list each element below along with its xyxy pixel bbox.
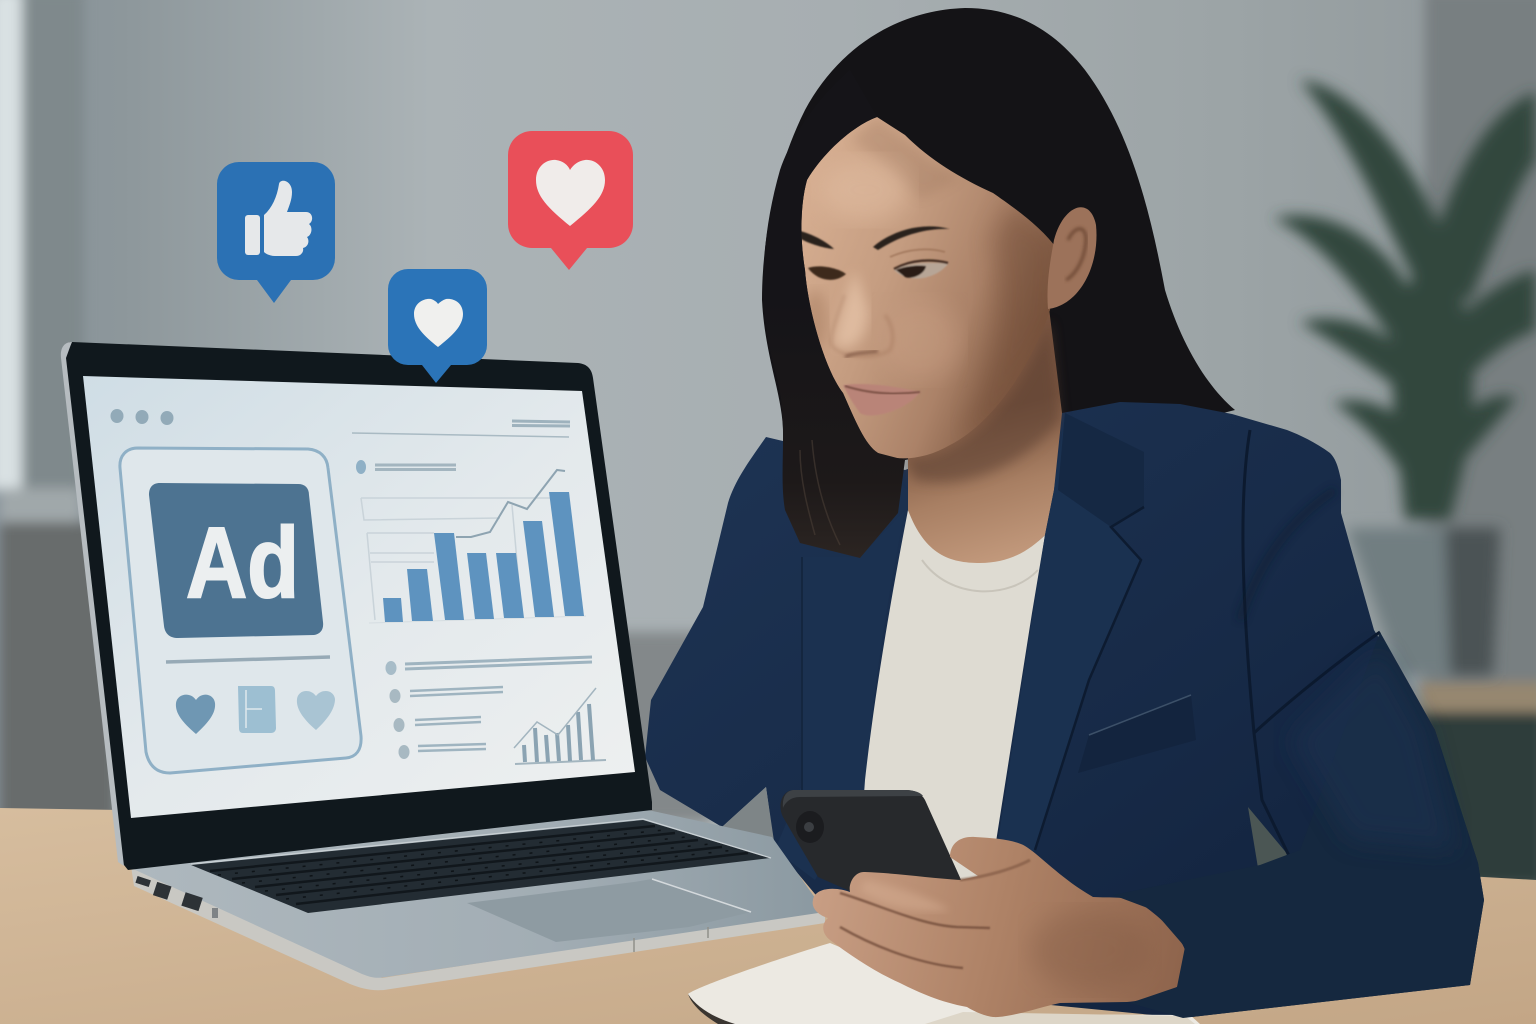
face — [801, 117, 1058, 458]
eyes — [808, 249, 948, 280]
jacket pocket — [1078, 695, 1196, 773]
ad box — [149, 483, 323, 638]
keyboard — [191, 820, 770, 913]
lips — [843, 384, 920, 415]
card heart right — [297, 691, 335, 730]
gaps between arms and torso — [722, 787, 775, 848]
neck shadow — [905, 320, 1060, 482]
bar chart — [356, 460, 586, 623]
wooden table — [0, 808, 1536, 1024]
phone — [780, 790, 962, 892]
floating bubble: red heart — [508, 131, 633, 270]
back hair — [762, 8, 1235, 460]
list with mini chart — [386, 657, 606, 764]
neck — [908, 300, 1062, 563]
face shading — [808, 120, 1053, 424]
background plant — [1273, 80, 1536, 675]
jacket left front panel — [775, 510, 905, 880]
ports — [135, 876, 218, 918]
icon: thumb — [245, 181, 312, 256]
laptop — [61, 342, 825, 990]
notebook on table — [688, 943, 1200, 1024]
jacket sleeve cuff — [1113, 632, 1484, 1018]
trackpad — [467, 879, 751, 942]
floating bubble: small heart on laptop — [388, 269, 487, 383]
brows — [800, 231, 834, 249]
nose — [832, 295, 893, 356]
woman — [645, 8, 1484, 1018]
card heart left — [176, 695, 215, 734]
laptop screen — [83, 376, 635, 818]
icon: heart — [536, 160, 605, 226]
jacket body — [645, 402, 1484, 1018]
sleeve seam and folds — [1243, 430, 1380, 862]
icon: small heart — [414, 299, 463, 347]
floating bubble: thumbs up — [217, 162, 335, 303]
ad label: Ad — [186, 507, 299, 619]
pot — [1347, 528, 1500, 675]
lapel — [992, 413, 1144, 880]
laptop lid — [62, 342, 652, 870]
front hair: left lock — [764, 70, 905, 558]
card square — [238, 686, 276, 733]
laptop base — [131, 810, 825, 978]
ad card — [120, 448, 361, 773]
window dots — [110, 409, 174, 425]
ear — [1047, 207, 1097, 309]
laptop front lip — [131, 866, 825, 990]
hand holding phone — [813, 837, 1185, 1017]
sleeve highlight — [1290, 650, 1455, 850]
cream shirt — [858, 510, 1045, 880]
